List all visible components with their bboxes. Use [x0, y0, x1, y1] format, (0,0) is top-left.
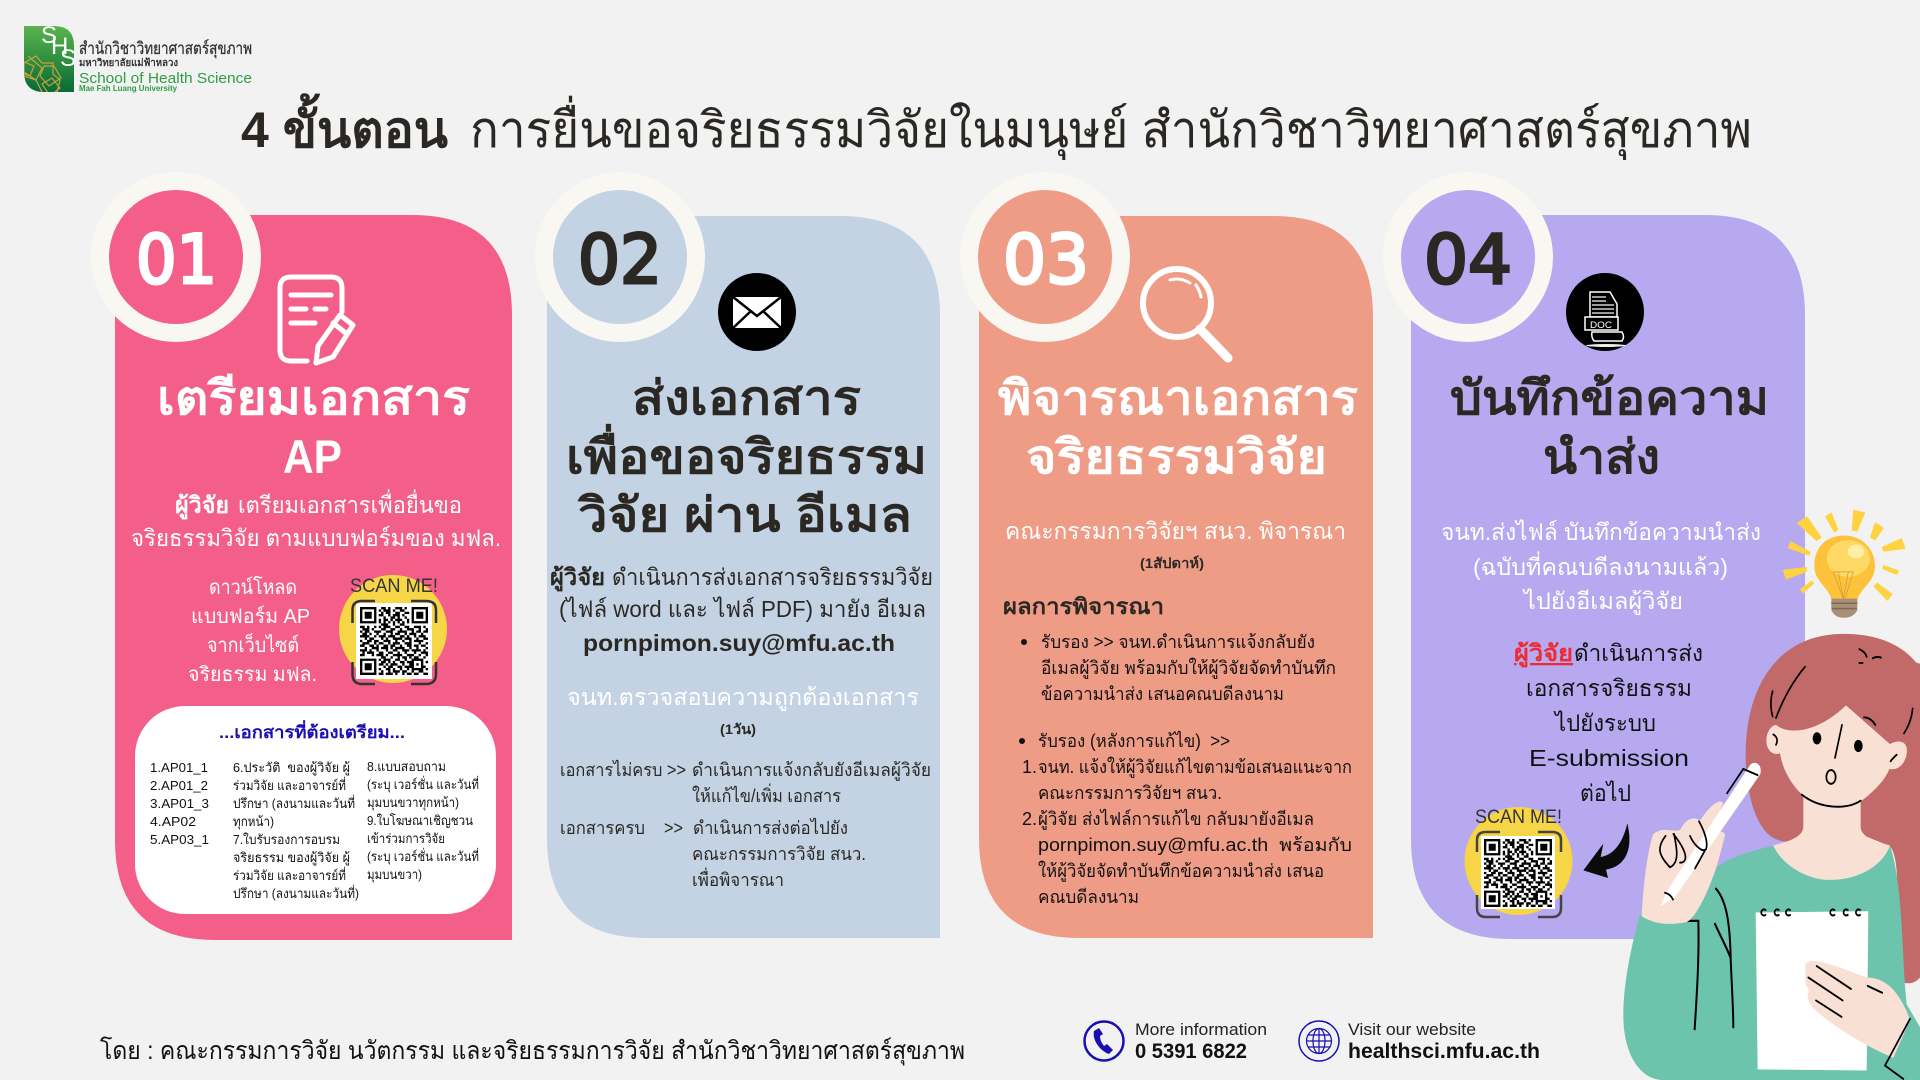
list column 3: เข้าร่วมการวิจัย [367, 831, 445, 846]
face lines [1771, 649, 1913, 807]
hand on notepad [1805, 961, 1910, 1079]
QR code: scan me [339, 575, 447, 684]
hand holding pen [1642, 763, 1761, 924]
text: committee reviews: (1สัปดาห์) [1140, 555, 1204, 571]
website text: Visit our website [1348, 1020, 1476, 1039]
text: incomplete and complete outcomes: ให้แก้ไข/เพิ่ม เอกสาร [692, 783, 841, 806]
title [241, 93, 1752, 160]
text: incomplete and complete outcomes: ดำเนินการแจ้งกลับยังอีเมลผู้วิจัย [692, 760, 931, 781]
logo text: มหาวิทยาลัยแม่ฟ้าหลวง [79, 57, 178, 69]
title: การยื่นขอจริยธรรมวิจัยในมนุษย์ สำนักวิชาวิทยาศาสตร์สุขภาพ [470, 96, 1752, 160]
contact: phone [1084, 1020, 1267, 1063]
contact: website [1299, 1020, 1540, 1063]
heading: send for ethics [566, 371, 927, 541]
contact: website: healthsci.mfu.ac.th [1348, 1040, 1540, 1063]
text: download form: ดาวน์โหลด [209, 576, 297, 599]
icon: phone [1084, 1022, 1124, 1060]
logo mark: S [60, 45, 76, 72]
text: committee reviews: คณะกรรมการวิจัยฯ สนว. พิจารณา [1005, 518, 1346, 544]
list column 2: 6.ประวัติ ของผู้วิจัย ผู้ [233, 760, 350, 776]
heading: cover memo [1450, 371, 1769, 483]
text: committee reviews [1005, 518, 1346, 571]
text: incomplete and complete outcomes: ดำเนินการส่งต่อไปยัง [693, 817, 848, 838]
text: researcher submits: ต่อไป [1580, 780, 1631, 806]
text: researcher submits: ผู้วิจัย [1514, 640, 1573, 668]
text: staff sends memo: จนท.ส่งไฟล์ บันทึกข้อความนำส่ง [1441, 519, 1761, 545]
number badge 01 [91, 172, 261, 342]
text: review results: ผู้วิจัย ส่งไฟล์การแก้ไข กลับมายังอีเมล [1038, 808, 1314, 830]
text: researcher prepares: จริยธรรมวิจัย ตามแบบฟอร์มของ มฟล. [131, 525, 501, 551]
text: download form: จริยธรรม มฟล. [188, 664, 317, 686]
text: download form: จากเว็บไซต์ [207, 632, 299, 657]
panel: step 01 prepare documents [91, 172, 512, 940]
text: researcher prepares: เตรียมเอกสารเพื่อยื่นขอ [238, 489, 462, 518]
text: researcher submits: ไปยังระบบ [1553, 710, 1656, 736]
notepad [1756, 909, 1868, 1071]
illustration: light bulb [1783, 509, 1906, 618]
text: researcher sends documents: ผู้วิจัย [550, 564, 605, 592]
heading: prepare AP: เตรียมเอกสาร [157, 371, 470, 424]
QR code: e-submission: SCAN ME! [1475, 807, 1562, 828]
arrow to QR [1583, 823, 1629, 878]
list column 2: 7.ใบรับรองการอบรม [233, 832, 340, 847]
text: researcher submits: เอกสารจริยธรรม [1526, 675, 1692, 701]
heading: send for ethics: ส่งเอกสาร [632, 371, 861, 424]
text: review results: คณบดีลงนาม [1038, 887, 1139, 907]
logo mark: H [51, 33, 68, 60]
list column 1: 2.AP01_2 [150, 778, 208, 793]
list column 3: (ระบุ เวอร์ชั่น และวันที่ [367, 776, 479, 793]
text: review results: รับรอง (หลังการแก้ไข) >> [1038, 730, 1230, 751]
number badge 01: 01 [136, 221, 217, 300]
footer credit: โดย : คณะกรรมการวิจัย นวัตกรรม และจริยธรรมการวิจัย สำนักวิชาวิทยาศาสตร์สุขภาพ [100, 1036, 965, 1066]
text: incomplete and complete outcomes: เพื่อพิจารณา [692, 867, 784, 890]
text: review results: 2. [1022, 809, 1037, 829]
text: staff sends memo: (ฉบับที่คณบดีลงนามแล้ว) [1473, 551, 1728, 580]
text: review results: อีเมลผู้วิจัย พร้อมกับให้ผู้วิจัยจัดทำบันทึก [1041, 657, 1336, 679]
list column 3: (ระบุ เวอร์ชั่น และวันที่ [367, 848, 479, 865]
QR code: e-submission [1464, 807, 1572, 917]
text: researcher sends documents [550, 564, 933, 656]
logo text: Mae Fah Luang University [79, 84, 178, 93]
bangs [1776, 641, 1920, 744]
logo text: สำนักวิชาวิทยาศาสตร์สุขภาพ [79, 39, 252, 59]
heading: send for ethics: เพื่อขอจริยธรรม [566, 423, 927, 483]
heading: prepare AP: AP [283, 430, 342, 483]
text: review results: คณะกรรมการวิจัยฯ สนว. [1038, 783, 1222, 803]
icon: envelope [718, 273, 796, 351]
illustration: woman with pen and notepad [1583, 634, 1920, 1080]
number badge 04: 04 [1424, 221, 1512, 300]
text: download form: แบบฟอร์ม AP [191, 605, 310, 628]
text: researcher prepares [131, 489, 501, 551]
number badge 02: 02 [578, 221, 662, 300]
text: staff sends memo: ไปยังอีเมลผู้วิจัย [1522, 588, 1683, 615]
heading: send for ethics: วิจัย ผ่าน อีเมล [577, 488, 912, 541]
panel: step 04 cover memo [1383, 172, 1805, 939]
number badge 03: 03 [1003, 221, 1089, 300]
number badge 03 [960, 172, 1130, 342]
text: researcher prepares: ผู้วิจัย [175, 492, 229, 520]
text: incomplete and complete outcomes: คณะกรรมการวิจัย สนว. [692, 844, 866, 864]
list column 3 [367, 759, 479, 883]
list column 1: 5.AP03_1 [150, 832, 209, 847]
list column 2: ร่วมวิจัย และอาจารย์ที่ [233, 867, 346, 883]
heading: prepare AP [157, 371, 470, 483]
list column 3: มุมบนขวา) [367, 867, 422, 883]
list column 3: มุมบนขวาทุกหน้า) [367, 795, 459, 811]
list column 2: ทุกหน้า) [233, 814, 274, 830]
text: staff verifies: (1วัน) [720, 721, 756, 737]
text: researcher sends documents: (ไฟล์ word และ ไฟล์ PDF) มายัง อีเมล [559, 596, 926, 622]
heading: review: จริยธรรมวิจัย [1026, 430, 1327, 483]
heading: cover memo: บันทึกข้อความ [1450, 371, 1769, 424]
text: researcher submits [1514, 640, 1703, 806]
panel: required documents list [135, 706, 496, 914]
logo text: School of Health Science [79, 70, 252, 87]
text: incomplete and complete outcomes: เอกสารครบ [560, 818, 645, 838]
heading: review: พิจารณาเอกสาร [998, 371, 1358, 424]
title: 4 ขั้นตอน [241, 93, 448, 158]
icon: globe [1299, 1021, 1339, 1061]
phone text: More information [1135, 1020, 1267, 1039]
text: researcher submits: E-submission [1529, 745, 1689, 771]
heading: cover memo: นำส่ง [1543, 430, 1660, 483]
list column 3: 9.ใบโฆษณาเชิญชวน [367, 813, 473, 828]
logo text [79, 39, 252, 93]
list heading: ...เอกสารที่ต้องเตรียม... [219, 720, 405, 742]
logo mark [24, 26, 74, 92]
hair [1746, 634, 1920, 983]
number badge 04 [1383, 172, 1553, 342]
text: researcher submits: ดำเนินการส่ง [1574, 640, 1703, 666]
sweater lines [1687, 889, 1733, 1029]
pen [1661, 763, 1761, 906]
list column 2: ร่วมวิจัย และอาจารย์ที่ [233, 777, 346, 793]
text: review results: 1. [1022, 757, 1037, 777]
list column 2: จริยธรรม ของผู้วิจัย ผู้ [233, 850, 350, 866]
icon: document with pencil [280, 277, 353, 363]
icon: DOC file: DOC [1590, 320, 1613, 330]
contact: phone: 0 5391 6822 [1135, 1040, 1247, 1063]
list column 1: 1.AP01_1 [150, 760, 208, 775]
logo mark: S [41, 22, 57, 49]
text: review results: รับรอง >> จนท.ดำเนินการแจ้งกลับยัง [1041, 632, 1315, 652]
list column 1: 4.AP02 [150, 814, 196, 829]
list column 2: ปรึกษา (ลงนามและวันที่) [233, 885, 359, 901]
text: researcher sends documents: ดำเนินการส่งเอกสารจริยธรรมวิจัย [612, 564, 933, 590]
list column 1 [150, 760, 209, 847]
list column 1: 3.AP01_3 [150, 796, 209, 811]
text: download form [188, 576, 317, 686]
text: incomplete and complete outcomes: >> [664, 818, 683, 838]
text: incomplete and complete outcomes: เอกสารไม่ครบ >> [560, 759, 686, 780]
list column 3: 8.แบบสอบถาม [367, 759, 446, 774]
panel: step 02 send by email [535, 172, 940, 938]
panel: step 03 review [960, 172, 1373, 938]
list column 2: ปรึกษา (ลงนามและวันที่ [233, 795, 355, 811]
text: review results [1003, 594, 1352, 907]
text: review results: ให้ผู้วิจัยจัดทำบันทึกข้อความนำส่ง เสนอ [1038, 860, 1324, 882]
text: review results: ข้อความนำส่ง เสนอคณบดีลงนาม [1041, 684, 1284, 704]
icon: magnifier [1143, 269, 1228, 358]
text: review results: ผลการพิจารณา [1003, 594, 1164, 619]
text: staff sends memo [1441, 519, 1761, 615]
neck and face [1766, 694, 1907, 880]
icon: DOC file [1566, 273, 1644, 351]
text: review results: pornpimon.suy@mfu.ac.th พร้อมกับ [1038, 835, 1352, 855]
text: incomplete and complete outcomes [560, 759, 931, 890]
list column 2 [233, 760, 359, 901]
logo: School of Health Science [24, 26, 252, 92]
text: researcher sends documents: pornpimon.suy@mfu.ac.th [583, 630, 895, 656]
text: staff verifies: จนท.ตรวจสอบความถูกต้องเอกสาร [567, 684, 919, 711]
QR code: scan me: SCAN ME! [350, 576, 438, 597]
text: review results: จนท. แจ้งให้ผู้วิจัยแก้ไขตามข้อเสนอแนะจาก [1038, 756, 1352, 778]
body sweater [1623, 845, 1920, 1080]
text: staff verifies [567, 684, 919, 737]
heading: review [998, 371, 1358, 483]
number badge 02 [535, 172, 705, 342]
